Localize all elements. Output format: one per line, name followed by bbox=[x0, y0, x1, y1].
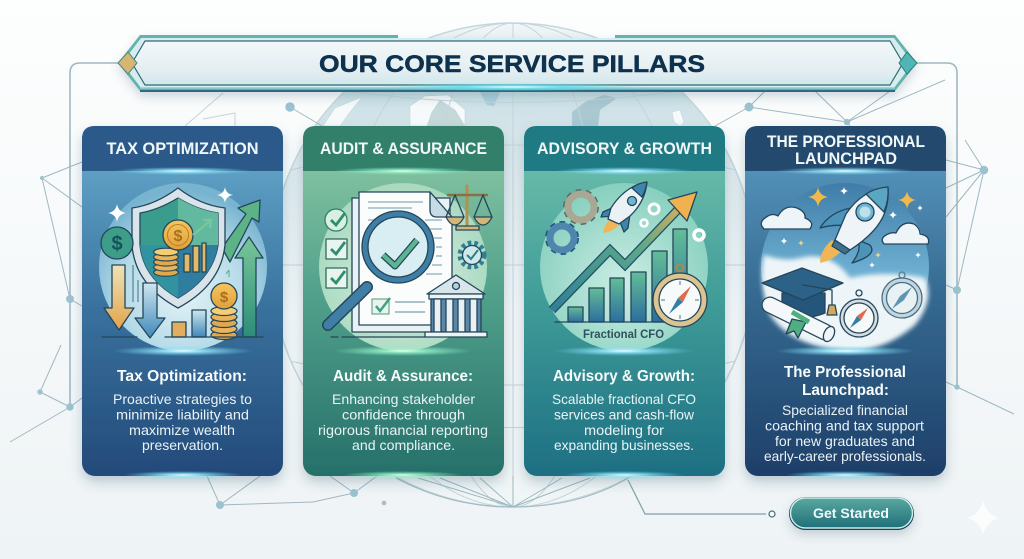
body heading: Advisory & Growth: bbox=[553, 368, 695, 385]
body text: Proactive strategies to bbox=[113, 391, 252, 407]
body text: and compliance. bbox=[352, 437, 455, 453]
body heading: Tax Optimization: bbox=[117, 368, 247, 385]
panel glows bbox=[554, 167, 694, 479]
banner end gem right bbox=[899, 52, 917, 74]
panel: audit and assurance bbox=[303, 126, 504, 479]
body heading: Audit & Assurance: bbox=[333, 368, 473, 385]
body heading: Launchpad: bbox=[802, 382, 889, 399]
network connector lines and nodes bbox=[10, 63, 1014, 509]
panel glows bbox=[775, 167, 915, 479]
illustration: shield, coins and arrows: $ bbox=[220, 289, 229, 306]
body text: early-career professionals. bbox=[764, 448, 926, 464]
chart label: Fractional CFO bbox=[583, 329, 664, 341]
title: OUR CORE SERVICE PILLARS bbox=[319, 51, 705, 78]
panel header bbox=[745, 126, 946, 171]
panel: advisory and growth bbox=[524, 126, 725, 479]
panel header bbox=[82, 126, 283, 171]
body text: confidence through bbox=[342, 406, 465, 422]
get started button bbox=[789, 497, 914, 530]
get started button: Get Started bbox=[813, 505, 889, 521]
call-to-action connector bbox=[628, 480, 775, 517]
heading bbox=[767, 133, 925, 168]
panel glows bbox=[333, 167, 473, 479]
continents bbox=[323, 92, 684, 126]
body text: for new graduates and bbox=[775, 433, 915, 449]
body heading: The Professional bbox=[784, 364, 906, 381]
illustration: shield, coins and arrows: $ bbox=[174, 228, 183, 245]
body text: preservation. bbox=[142, 437, 223, 453]
body text bbox=[764, 402, 926, 464]
body text: maximize wealth bbox=[129, 422, 235, 438]
body text: Scalable fractional CFO bbox=[552, 391, 696, 407]
body text bbox=[552, 391, 696, 453]
heading: TAX OPTIMIZATION bbox=[106, 140, 258, 158]
panel: tax optimization bbox=[82, 126, 283, 479]
sparkle watermark bbox=[967, 500, 999, 535]
heading: ADVISORY & GROWTH bbox=[537, 140, 712, 158]
body heading bbox=[784, 364, 906, 399]
illustration: shield, coins and arrows bbox=[99, 183, 267, 351]
panel glows bbox=[113, 167, 253, 479]
body text: expanding businesses. bbox=[554, 437, 694, 453]
banner end gem left bbox=[118, 52, 137, 74]
heading: LAUNCHPAD bbox=[795, 150, 897, 168]
body text: Enhancing stakeholder bbox=[332, 391, 475, 407]
illustration: rocket, graduation cap and compasses bbox=[761, 183, 929, 351]
panel header bbox=[303, 126, 504, 171]
illustration: shield, coins and arrows: $ bbox=[111, 233, 123, 255]
heading: AUDIT & ASSURANCE bbox=[320, 140, 487, 158]
panel: the professional launchpad bbox=[745, 126, 946, 479]
body text bbox=[318, 391, 488, 453]
body text: rigorous financial reporting bbox=[318, 422, 488, 438]
illustration: rocket, growth chart and compass bbox=[540, 182, 708, 351]
body text: coaching and tax support bbox=[765, 418, 924, 434]
body text: modeling for bbox=[584, 422, 664, 438]
panel header bbox=[524, 126, 725, 171]
world globe background bbox=[271, 23, 755, 507]
title banner bbox=[118, 35, 917, 91]
body text: services and cash-flow bbox=[554, 406, 695, 422]
body text: minimize liability and bbox=[116, 406, 249, 422]
illustration: audit document and magnifier bbox=[319, 183, 492, 351]
body text bbox=[113, 391, 252, 453]
body text: Specialized financial bbox=[782, 402, 908, 418]
heading: THE PROFESSIONAL bbox=[767, 133, 925, 151]
